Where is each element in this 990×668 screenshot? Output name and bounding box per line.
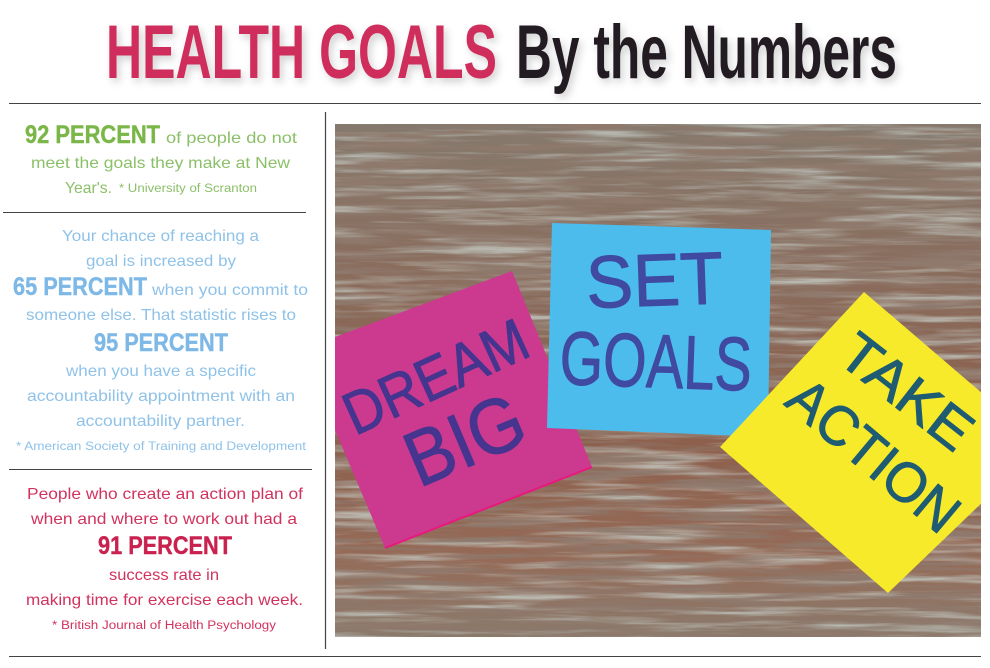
note: Set Goals: SET	[585, 236, 724, 324]
source: University of Scranton: * University of Scranton	[119, 183, 257, 195]
note: Dream Big: DREAM	[333, 306, 539, 448]
panel: statistic 65 and 95 percent: when you have a specific	[65, 363, 256, 380]
stat: 91 percent: 91 PERCENT	[98, 532, 232, 560]
note: Take Action: ACTION	[775, 365, 973, 545]
panel: statistic 92 percent: of people do not	[166, 130, 298, 147]
wood background	[335, 124, 981, 637]
panel: statistic 65 and 95 percent: accountability partner.	[76, 413, 245, 430]
stat: 65 percent: 65 PERCENT	[13, 273, 147, 301]
note: Dream Big	[333, 271, 592, 548]
stat: 92 percent: 92 PERCENT	[25, 121, 160, 149]
note: Take Action	[720, 292, 990, 593]
panel: statistic 91 percent: People who create an action plan of	[27, 486, 304, 503]
panel: statistic 65 and 95 percent: goal is increased by	[86, 253, 236, 270]
title: HEALTH GOALS	[106, 10, 497, 95]
source: British Journal of Health Psychology: * British Journal of Health Psychology	[52, 620, 276, 632]
panel: statistic 91 percent: making time for exercise each week.	[26, 592, 303, 609]
note: Set Goals	[547, 223, 771, 437]
panel: statistic 65 and 95 percent: Your chance of reaching a	[62, 228, 259, 245]
source: American Society of Training and Development: * American Society of Training and Development	[16, 441, 307, 453]
panel: statistic 65 and 95 percent: when you commit to	[151, 282, 308, 299]
panel: statistic 91 percent	[26, 486, 304, 632]
panel: statistic 92 percent: Year's.	[65, 180, 112, 197]
note: Set Goals: GOALS	[558, 316, 753, 408]
panel: statistic 91 percent: when and where to work out had a	[30, 511, 297, 528]
panel: statistic 91 percent: success rate in	[109, 567, 219, 584]
panel: statistic 65 and 95 percent: someone else. That statistic rises to	[26, 307, 296, 324]
note: Dream Big: BIG	[391, 375, 538, 504]
photo: sticky notes on wood	[333, 124, 990, 637]
panel: statistic 65 and 95 percent: accountability appointment with an	[27, 388, 295, 405]
panel: statistic 65 and 95 percent	[13, 228, 308, 453]
note: Take Action: TAKE	[828, 320, 986, 463]
panel: statistic 92 percent: meet the goals they make at New	[31, 155, 290, 172]
panel: statistic 92 percent	[25, 121, 298, 197]
stat: 95 percent: 95 PERCENT	[94, 329, 228, 357]
